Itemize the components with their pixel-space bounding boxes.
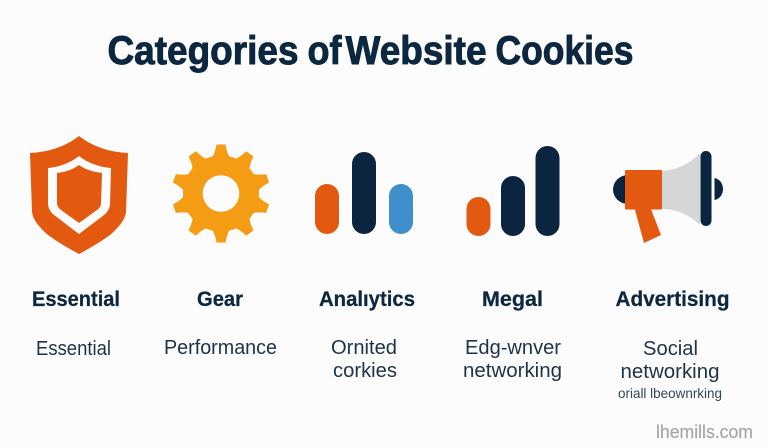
column 4 text: networking (463, 360, 562, 382)
icon: shield (30, 136, 128, 254)
column 4 text (463, 287, 562, 382)
column 5 text: networking (620, 361, 720, 383)
column 2 text: Gear (197, 287, 244, 311)
column 1 text: Essential (32, 287, 120, 311)
title: Categories (108, 29, 298, 73)
icon: megaphone (613, 151, 723, 243)
column 5 text: oriall lbeownrking (618, 385, 722, 401)
column 4 text: Edg-wnver (465, 337, 561, 359)
icon: analytics bars (315, 152, 413, 234)
column 1 text (32, 287, 120, 360)
column 1 text: Essential (36, 338, 111, 360)
column 3 text: corkies (333, 360, 397, 382)
title: of (308, 29, 342, 73)
column 5 text (616, 287, 730, 401)
title: Website (346, 29, 486, 73)
column 5 text: Social (643, 338, 698, 360)
column 5 text: Advertising (616, 287, 730, 311)
column 4 text: Megal (482, 287, 543, 311)
column 2 text (164, 287, 277, 359)
icon: gear (170, 144, 272, 242)
title: Cookies (496, 29, 634, 73)
column 3 text: Ornited (331, 337, 397, 359)
icon: signal bars (466, 146, 560, 236)
column 3 text (319, 287, 415, 382)
watermark: lhemills.com (656, 422, 753, 442)
column 2 text: Performance (164, 337, 277, 359)
column 3 text: Analıytics (319, 287, 415, 311)
